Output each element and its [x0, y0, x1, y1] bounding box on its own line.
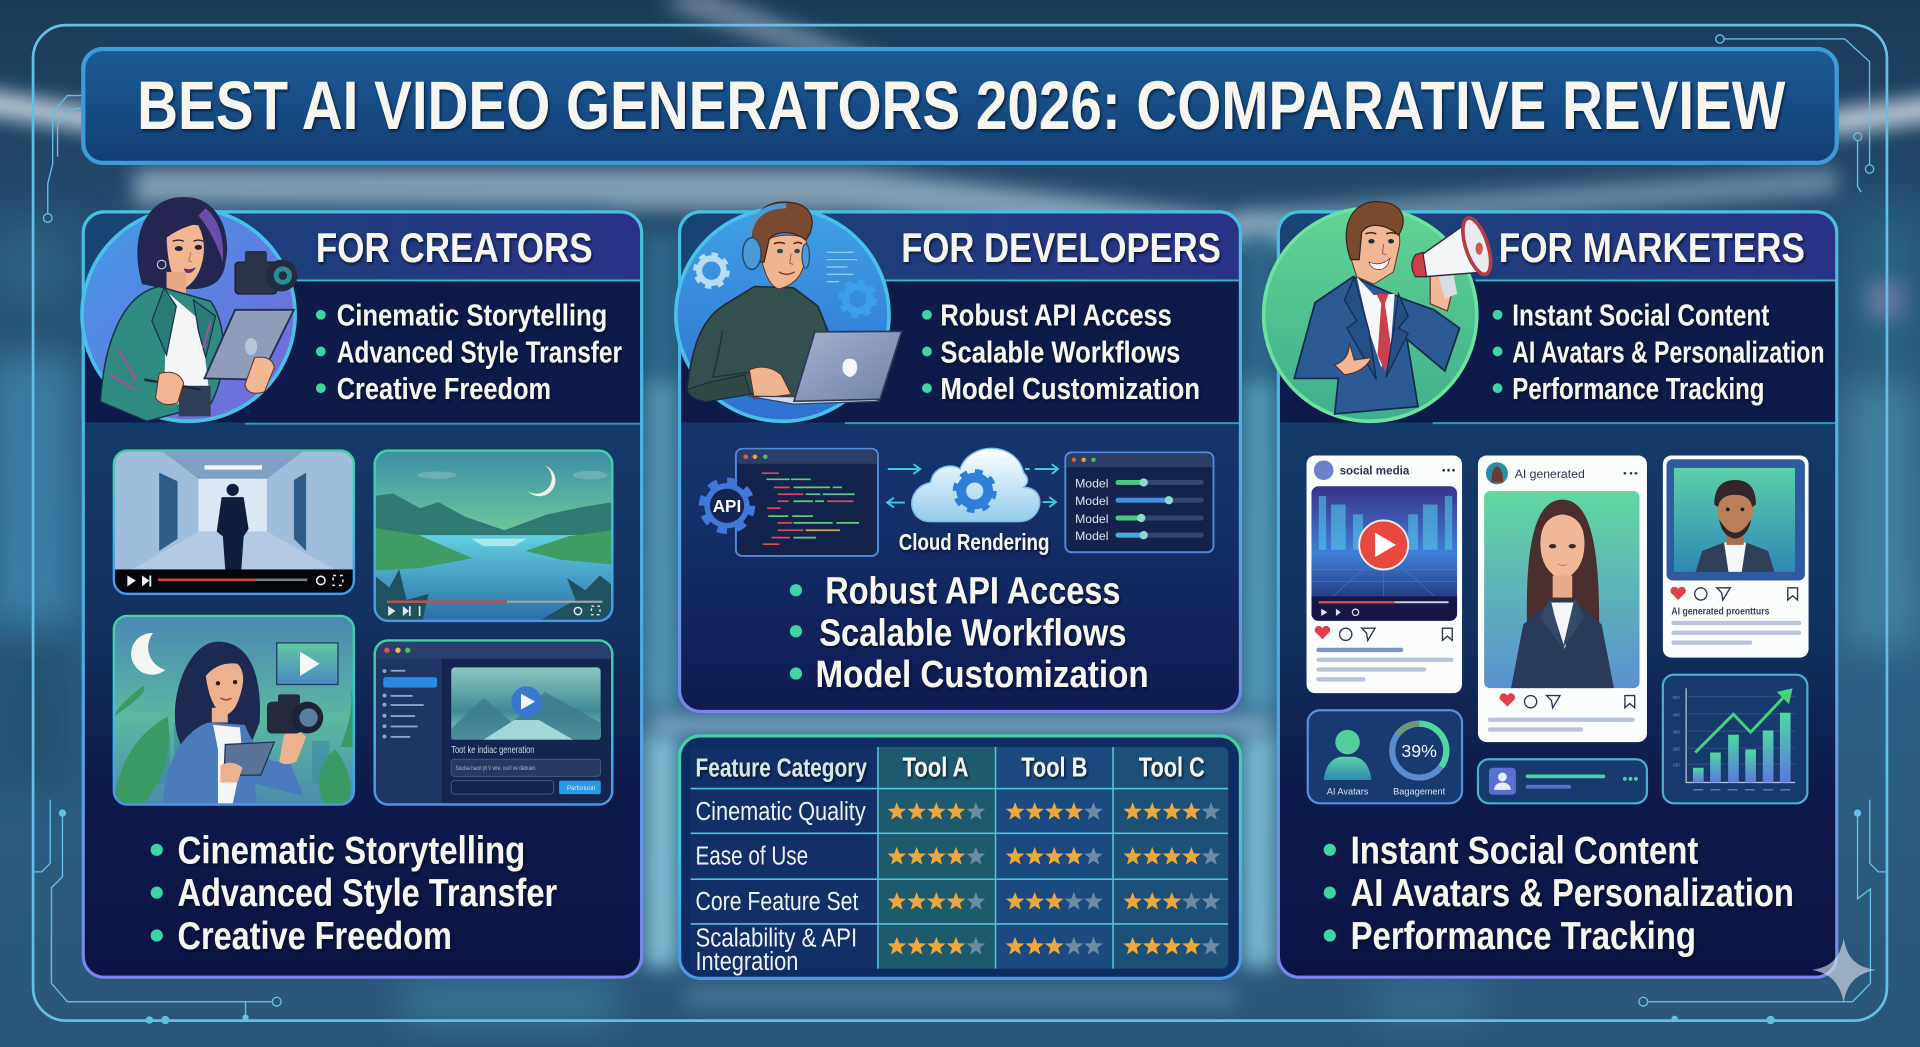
creators bullets top: Cinematic Storytelling	[337, 299, 607, 333]
performance chart: 500	[1673, 695, 1680, 700]
stats box: avatars and engagement: 39%	[1401, 741, 1437, 761]
post actions	[1670, 587, 1798, 600]
social card: AI presenter: AI generated	[1515, 467, 1585, 481]
code editor window	[736, 449, 878, 556]
marketers bullets bottom: AI Avatars & Personalization	[1351, 872, 1794, 915]
row labels: Core Feature Set	[696, 888, 858, 916]
thumbnail: hallway video	[114, 451, 354, 594]
model sliders window: Model	[1075, 494, 1108, 508]
developers bullets bottom: Model Customization	[816, 654, 1149, 696]
creators bullets top	[316, 299, 622, 406]
model sliders window: Model	[1075, 512, 1108, 526]
marketers bullets top: AI Avatars & Personalization	[1512, 335, 1824, 369]
social card: AI presenter	[1478, 456, 1647, 742]
thumbnail: creator with camera	[114, 616, 356, 805]
creators bullets bottom: Advanced Style Transfer	[178, 872, 557, 915]
arrows: data flow	[887, 464, 1058, 507]
table header: Tool A	[902, 751, 969, 782]
developers bullets top: Model Customization	[940, 372, 1200, 406]
social card: video post: social media	[1340, 465, 1410, 478]
row labels: Scalability & API	[696, 925, 857, 953]
post actions	[1500, 693, 1635, 708]
developers heading: FOR DEVELOPERS	[901, 224, 1221, 271]
panel: for creators	[83, 212, 642, 977]
performance chart: 400	[1673, 712, 1680, 717]
table header	[696, 751, 1205, 782]
panel: for marketers	[1278, 212, 1837, 977]
creators bullets top: Advanced Style Transfer	[337, 335, 622, 369]
stats box: avatars and engagement: AI Avatars	[1327, 787, 1369, 797]
creators heading: FOR CREATORS	[316, 224, 593, 271]
star ratings	[888, 802, 1220, 954]
creators bullets bottom: Cinematic Storytelling	[178, 829, 525, 872]
performance chart: 300	[1673, 730, 1680, 735]
comparison table	[680, 736, 1240, 978]
icon: API gear: API	[713, 496, 741, 516]
marketers bullets bottom	[1324, 829, 1794, 958]
panel: for developers	[680, 212, 1240, 711]
model sliders window: Model	[1075, 529, 1108, 543]
post actions	[1315, 626, 1452, 640]
developers bullets top	[922, 299, 1200, 406]
thumbnail: generator interface	[375, 640, 612, 805]
icon: developer portrait	[676, 202, 902, 421]
developers bullets top: Robust API Access	[940, 299, 1172, 333]
marketers bullets bottom: Performance Tracking	[1351, 915, 1696, 958]
model sliders window: Model	[1075, 476, 1108, 490]
marketers bullets top	[1493, 299, 1824, 406]
table header: Tool B	[1021, 751, 1087, 782]
developers bullets top: Scalable Workflows	[940, 335, 1180, 369]
creators bullets bottom: Creative Freedom	[178, 915, 452, 958]
social card: video post	[1307, 456, 1462, 693]
developers bullets bottom	[790, 571, 1149, 696]
performance chart: 200	[1673, 747, 1680, 752]
marketers bullets bottom: Instant Social Content	[1351, 829, 1698, 872]
watermark sparkle	[1812, 938, 1876, 1003]
marketers heading: FOR MARKETERS	[1499, 224, 1805, 271]
thumbnail: generator interface: Soulse hacn pt V wre, usirl ve debuen.	[456, 765, 537, 772]
model sliders window	[1065, 452, 1213, 552]
profile status bar	[1478, 759, 1647, 803]
icon: marketer portrait	[1264, 202, 1496, 421]
interface caption: Toot ke indiac generation	[451, 745, 534, 756]
performance chart	[1663, 675, 1807, 803]
thumbnail: generator interface: Parforiuon	[567, 785, 595, 792]
table header: Tool C	[1139, 751, 1205, 782]
stats box: avatars and engagement: Bagagement	[1393, 787, 1446, 797]
circuit nodes	[59, 809, 1861, 1024]
creators bullets top: Creative Freedom	[337, 372, 551, 406]
icon: API gear	[702, 481, 751, 530]
creators bullets bottom	[151, 829, 557, 958]
row labels: Integration	[696, 948, 798, 976]
performance chart: 100	[1673, 763, 1680, 768]
social card: presenter	[1663, 456, 1809, 658]
table header: Feature Category	[696, 754, 868, 782]
icon: megaphone	[1412, 215, 1496, 278]
marketers bullets top: Instant Social Content	[1512, 299, 1769, 333]
developers bullets bottom: Robust API Access	[825, 571, 1120, 613]
row labels	[696, 798, 866, 976]
row labels: Cinematic Quality	[696, 798, 866, 826]
thumbnail: lake landscape	[375, 451, 612, 621]
stats box: avatars and engagement	[1308, 710, 1462, 803]
icon: creator portrait	[82, 197, 298, 421]
marketers bullets top: Performance Tracking	[1512, 372, 1764, 406]
title banner	[83, 49, 1837, 163]
icon: cloud rendering	[899, 448, 1049, 555]
developers bullets bottom: Scalable Workflows	[819, 612, 1127, 654]
row labels: Ease of Use	[696, 843, 808, 871]
cloud label: Cloud Rendering	[899, 529, 1049, 555]
social card: presenter: AI generated proentturs	[1671, 607, 1770, 618]
